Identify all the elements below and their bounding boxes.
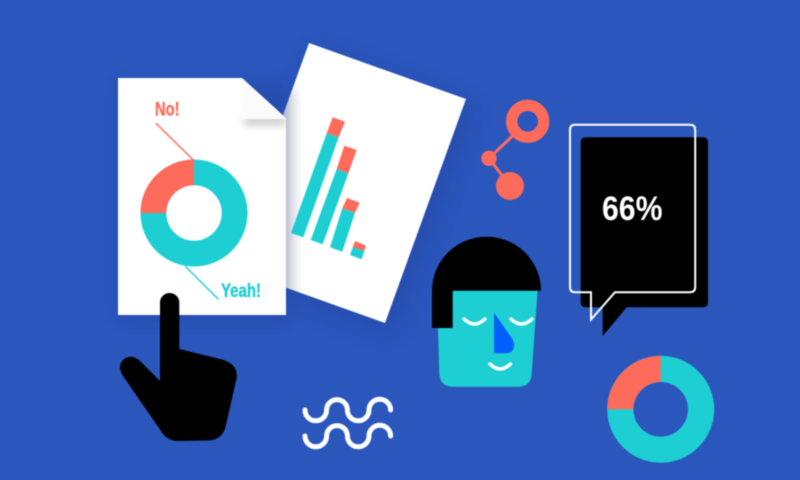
speech bubble [570,125,708,336]
donut chart [140,160,235,254]
page fold [242,78,286,126]
panel: document with donut chart [118,78,286,320]
hair [432,237,541,328]
icon: face [432,237,541,387]
label: Yeah!: Yeah! [221,281,261,302]
eyes and mouth [464,319,532,369]
icon: waves [305,399,391,447]
nose [494,313,514,353]
label: No! [155,100,193,160]
outline bubble [570,125,695,320]
icon: network nodes [481,105,544,200]
panel: tilted document with bar chart [282,42,466,326]
percentage: 66% [602,190,662,228]
label: Yeah! [185,266,261,302]
label: No!: No! [155,100,180,120]
black bubble [581,137,708,336]
icon: pointing hand [120,293,237,441]
donut chart: bottom right [607,356,701,450]
face shape [437,285,538,387]
bar chart [291,117,366,259]
